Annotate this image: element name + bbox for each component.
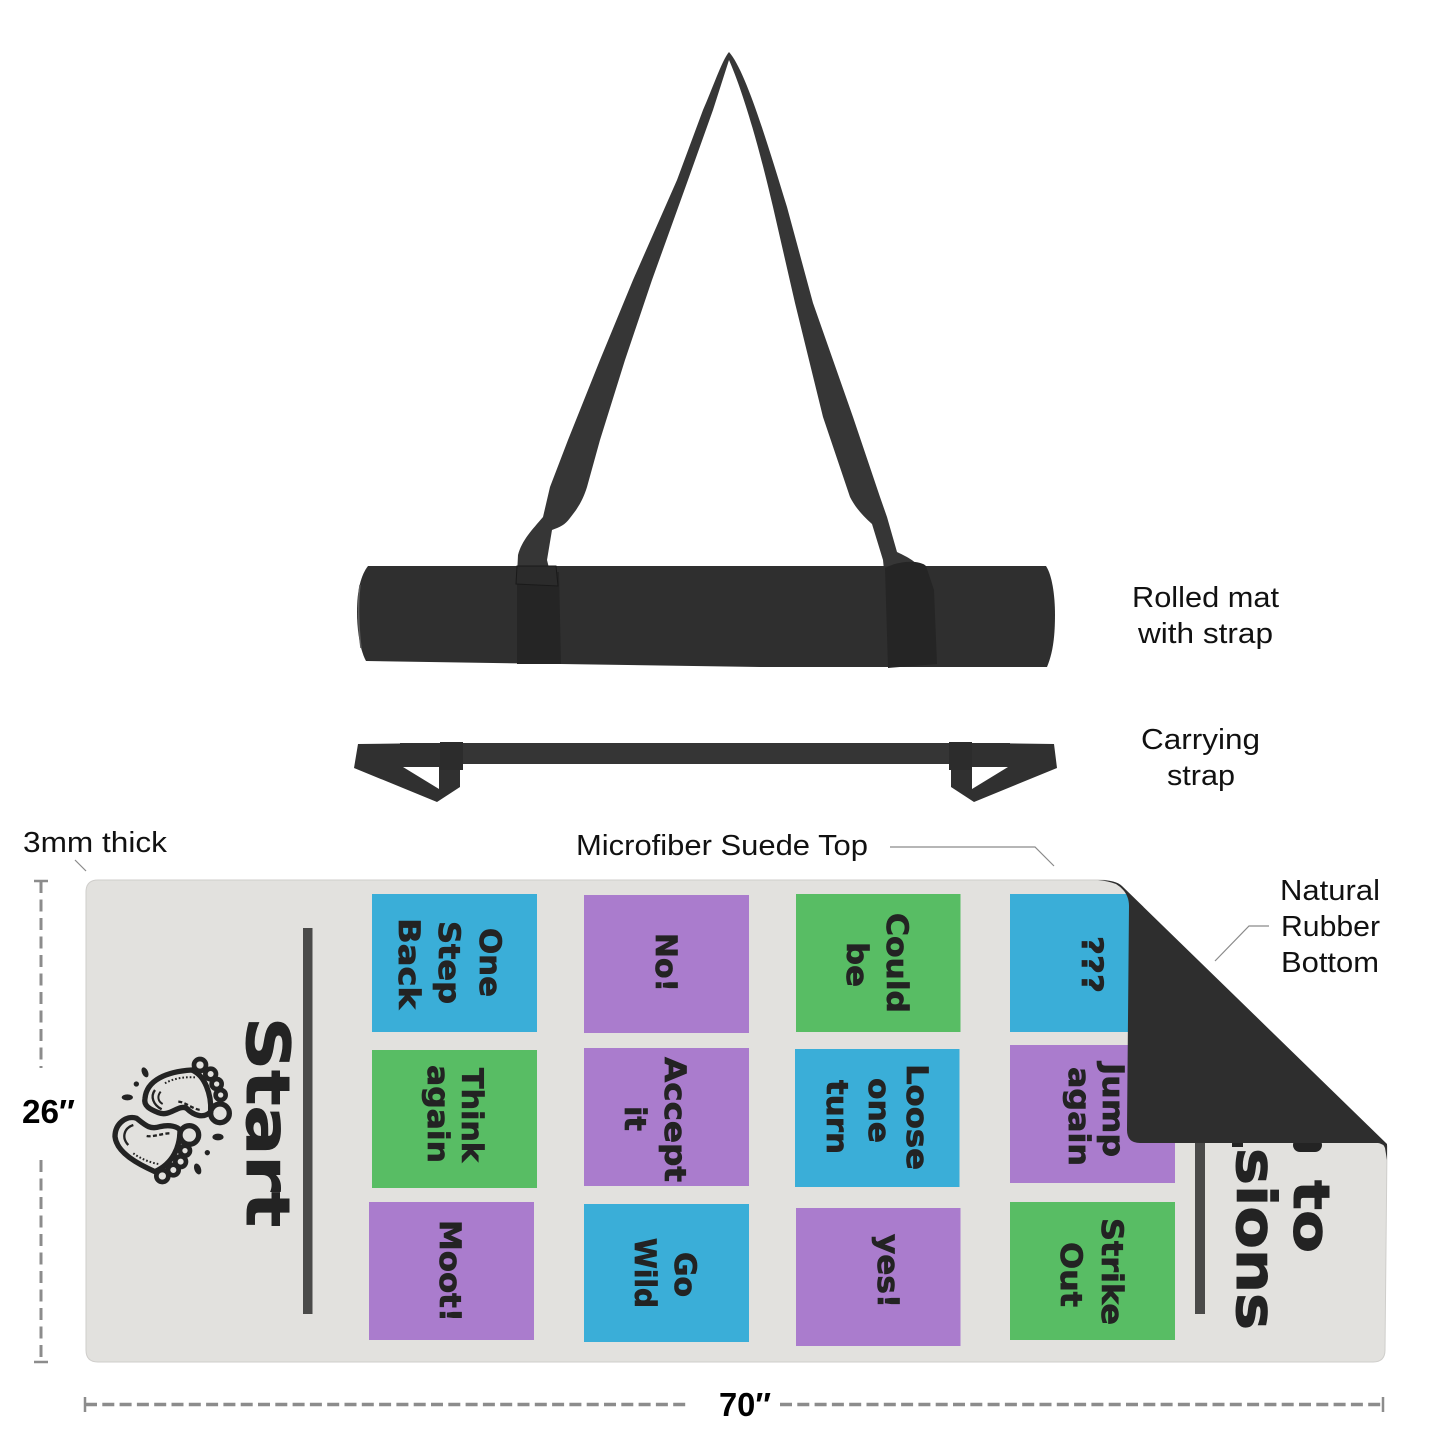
mat surface (86, 880, 1387, 1362)
card: One Step Back: One (473, 928, 507, 997)
card: Go Wild (584, 1204, 749, 1342)
card: No!: No! (649, 933, 683, 992)
heading: to: to (1282, 1180, 1340, 1253)
card: Jump again: again (1062, 1067, 1096, 1166)
label: 3mm thick: 3mm thick (23, 827, 168, 859)
carrying strap (354, 742, 1057, 802)
label: microfiber suede top: Microfiber Suede Top (576, 830, 868, 862)
right keeper (949, 742, 972, 770)
card: Go Wild: Go (668, 1252, 702, 1297)
card: One Step Back: Step (432, 921, 466, 1004)
heading: sions: sions (1224, 1148, 1287, 1330)
lower foot (115, 1118, 199, 1182)
clipped heading letter (1293, 1138, 1322, 1152)
label: natural rubber bottom: Natural (1280, 875, 1380, 907)
splash marks (122, 1066, 224, 1175)
rolled mat with strap (357, 52, 1055, 668)
finish divider (1195, 1140, 1205, 1314)
heading: Start: Start (232, 1017, 302, 1227)
card: Accept it: it (618, 1106, 652, 1131)
card: Strike Out: Out (1054, 1242, 1088, 1307)
left keeper (440, 742, 463, 770)
card: Moot! (369, 1202, 534, 1340)
card: Strike Out: Strike (1095, 1218, 1129, 1325)
left band (517, 572, 561, 664)
label: natural rubber bottom: Bottom (1281, 947, 1379, 979)
strap bar (400, 743, 1010, 764)
card: ??? (1010, 894, 1130, 1032)
card: Think again: Think (455, 1068, 489, 1163)
mat roll body (357, 566, 1055, 667)
card: Accept it: Accept (658, 1057, 692, 1182)
card: Think again (372, 1050, 537, 1188)
label: natural rubber bottom (1215, 875, 1380, 979)
card: Loose one turn: turn (820, 1080, 854, 1154)
right band (885, 562, 937, 668)
clipped heading letter stub (1232, 1140, 1243, 1147)
label: carrying strap: strap (1167, 760, 1235, 792)
icon: footprints (115, 1059, 229, 1182)
card: No! (584, 895, 749, 1033)
panel: flat mat (86, 880, 1387, 1362)
card: Loose one turn: one (862, 1078, 896, 1143)
label: microfiber suede top (576, 830, 1054, 866)
label: rolled mat with strap: Rolled mat (1132, 582, 1279, 614)
card: Could be: Could (880, 913, 914, 1013)
card: ???: ??? (1075, 936, 1109, 993)
right loop (949, 742, 1057, 802)
label: 3mm thick (23, 827, 168, 871)
mat roll end edge (359, 585, 361, 648)
card: yes!: yes! (871, 1234, 905, 1308)
card: Jump again: Jump (1096, 1061, 1130, 1157)
card: Strike Out (1010, 1202, 1175, 1340)
card: yes! (796, 1208, 960, 1346)
right strap arm (729, 52, 925, 580)
card: Could be (796, 894, 960, 1032)
hanging strap (517, 52, 925, 580)
card: Loose one turn: Loose (900, 1064, 934, 1170)
card: One Step Back: Back (392, 918, 426, 1010)
left strap arm (517, 52, 729, 580)
upper foot (145, 1059, 229, 1123)
label: natural rubber bottom: Rubber (1281, 911, 1380, 943)
label: rolled mat with strap: with strap (1137, 618, 1273, 650)
card: Could be: be (840, 942, 874, 987)
folded corner: rubber bottom (1098, 880, 1387, 1160)
left loop (354, 742, 463, 802)
width dimension 70 inches: 70″ (719, 1386, 771, 1423)
card: Jump again (1010, 1045, 1175, 1183)
card: Think again: again (421, 1065, 455, 1163)
label: carrying strap (1141, 724, 1260, 792)
label: rolled mat with strap (1132, 582, 1279, 650)
card: Accept it (584, 1048, 749, 1186)
card: Go Wild: Wild (628, 1238, 662, 1308)
left band tab (516, 566, 558, 586)
height dimension 26 inches: 26″ (22, 1093, 75, 1130)
start divider (303, 928, 312, 1314)
card: Loose one turn (795, 1049, 960, 1187)
card: Moot!: Moot! (433, 1220, 467, 1322)
card: One Step Back (372, 894, 537, 1032)
label: carrying strap: Carrying (1141, 724, 1260, 756)
